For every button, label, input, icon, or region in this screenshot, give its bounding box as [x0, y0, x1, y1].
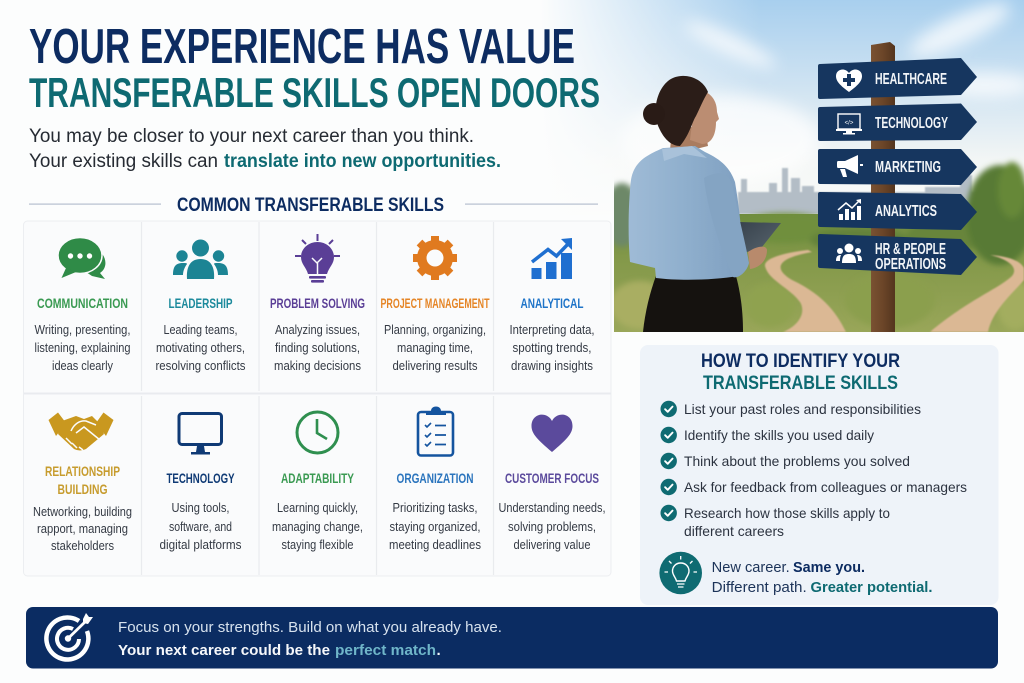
skill: organization: meeting deadlines: [389, 538, 481, 552]
sleeve: [732, 222, 749, 278]
skill: customer focus: delivering value: [514, 538, 591, 552]
skill: project management: managing time,: [397, 341, 473, 355]
icon: teal light bulb: [659, 552, 702, 594]
skill: problem solving: PROBLEM SOLVING: [270, 295, 365, 311]
title: YOUR EXPERIENCE HAS VALUE: [29, 20, 575, 74]
title: TRANSFERABLE SKILLS OPEN DOORS: [29, 69, 600, 116]
shirt: [629, 146, 742, 280]
sign: hr and people operations: HR & PEOPLE: [875, 241, 946, 258]
skill: analytical: [510, 238, 594, 373]
skill: organization: staying organized,: [390, 520, 480, 534]
skill: project management: [380, 236, 490, 373]
section heading: common transferable skills: COMMON TRANSFERABLE SKILLS: [177, 195, 444, 216]
sign: hr and people operations: [818, 234, 977, 275]
sign: technology: TECHNOLOGY: [875, 115, 948, 132]
icon: clock: [297, 412, 338, 453]
skill: relationship building: RELATIONSHIP: [45, 463, 120, 479]
skill: technology: digital platforms: [160, 538, 242, 552]
checklist: Think about the problems you solved: [684, 453, 910, 469]
skill: leadership: [156, 240, 246, 373]
icon: speech bubbles: [58, 238, 105, 279]
skill: adaptability: [272, 412, 363, 552]
skill: adaptability: Learning quickly,: [277, 501, 358, 515]
photo: woman at a career crossroads with signpost: [540, 0, 1024, 332]
panel heading: TRANSFERABLE SKILLS: [703, 372, 898, 394]
skill: relationship building: stakeholders: [51, 539, 114, 553]
skill: analytical: Interpreting data,: [510, 323, 594, 337]
post: [871, 42, 895, 332]
icon: handshake: [48, 412, 114, 450]
subtitle: You may be closer to your next career than you think.: [29, 126, 474, 147]
icon: team: [173, 240, 228, 279]
skill: customer focus: Understanding needs,: [498, 501, 606, 515]
skill: communication: Writing, presenting,: [34, 323, 130, 337]
skill: project management: delivering results: [392, 359, 478, 373]
forking paths: [765, 250, 1024, 332]
skill: analytical: spotting trends,: [512, 341, 592, 355]
skyline: [738, 168, 1000, 214]
skill: relationship building: rapport, managing: [37, 522, 128, 536]
skill: leadership: Leading teams,: [164, 323, 238, 337]
icon: light bulb: [295, 234, 340, 283]
skill: organization: ORGANIZATION: [396, 470, 474, 486]
checklist: different careers: [684, 523, 784, 539]
tagline: Greater potential.: [810, 580, 932, 596]
skill: adaptability: managing change,: [272, 520, 363, 534]
sign: analytics: [818, 192, 977, 230]
skill: technology: TECHNOLOGY: [166, 470, 235, 486]
title: [29, 20, 600, 116]
banner text: Your next career could be the: [118, 642, 330, 659]
skill: leadership: LEADERSHIP: [168, 295, 232, 311]
sign: hr and people operations: OPERATIONS: [875, 256, 946, 273]
icon: bar chart with arrow: [532, 238, 572, 279]
sign: marketing: MARKETING: [875, 159, 941, 176]
panel: how to identify your transferable skills: [640, 345, 998, 605]
tagline: Different path.: [712, 580, 807, 596]
checklist: [660, 401, 967, 539]
collar: [662, 146, 707, 161]
skill: relationship building: Networking, building: [33, 505, 132, 519]
tablet: [740, 222, 781, 252]
meadow: [614, 214, 1024, 332]
skill: communication: [34, 238, 131, 373]
sign: analytics: ANALYTICS: [875, 203, 937, 220]
banner text: [118, 619, 502, 659]
signpost: [818, 42, 977, 332]
tagline: New career.: [712, 560, 790, 576]
checklist: Ask for feedback from colleagues or managers: [684, 479, 967, 495]
skill: leadership: motivating others,: [156, 341, 245, 355]
banner text: Focus on your strengths. Build on what you already have.: [118, 619, 502, 636]
panel heading: [701, 350, 900, 394]
checklist: Research how those skills apply to: [684, 505, 890, 521]
banner text: .: [436, 642, 441, 659]
skill: project management: Planning, organizing,: [384, 323, 486, 337]
neck and face: [670, 127, 708, 148]
skill: adaptability: ADAPTABILITY: [281, 470, 354, 486]
skill: customer focus: CUSTOMER FOCUS: [505, 470, 599, 486]
skill: problem solving: making decisions: [274, 359, 361, 373]
skill: relationship building: [33, 412, 132, 553]
grass highlights: [614, 280, 1024, 329]
skill: communication: listening, explaining: [34, 341, 131, 355]
hair: [656, 76, 708, 146]
banner text: perfect match: [335, 642, 436, 659]
skill: problem solving: [270, 234, 365, 373]
distant trees: [604, 162, 1024, 265]
skill: technology: [160, 414, 242, 552]
skill: technology: software, and: [169, 520, 232, 534]
skill: relationship building: BUILDING: [58, 481, 108, 497]
sign: healthcare: HEALTHCARE: [875, 71, 947, 88]
skill: technology: Using tools,: [172, 501, 230, 515]
icon: heart: [532, 415, 572, 452]
sign: healthcare: [818, 58, 977, 99]
skill: customer focus: solving problems,: [508, 520, 596, 534]
skill: problem solving: Analyzing issues,: [275, 323, 360, 337]
tagline: [712, 560, 932, 596]
icon: gear: [413, 236, 457, 280]
skill: analytical: drawing insights: [511, 359, 593, 373]
skill: communication: COMMUNICATION: [37, 295, 128, 311]
subtitle: translate into new opportunities.: [224, 151, 501, 172]
skill: organization: Prioritizing tasks,: [392, 501, 478, 515]
panel: skills grid: [24, 221, 611, 576]
checklist: Identify the skills you used daily: [684, 427, 874, 443]
tagline: Same you.: [793, 560, 865, 576]
skill: organization: [389, 406, 481, 552]
skill: adaptability: staying flexible: [282, 538, 354, 552]
skill: customer focus: [498, 415, 606, 552]
skill: problem solving: finding solutions,: [275, 341, 360, 355]
sky: [561, 0, 1024, 168]
checklist: List your past roles and responsibilities: [684, 401, 921, 417]
banner: focus on your strengths: [26, 607, 998, 668]
hand: [748, 247, 767, 269]
sign: technology: [818, 104, 977, 141]
icon: clipboard checklist: [418, 406, 453, 456]
skill: project management: PROJECT MANAGEMENT: [380, 295, 490, 311]
subtitle: [29, 126, 501, 172]
woman: [629, 76, 781, 332]
icon: monitor: [179, 414, 222, 454]
skill: analytical: ANALYTICAL: [520, 295, 584, 311]
clouds: [635, 0, 1024, 168]
sign: technology: </>: [845, 120, 854, 126]
icon: target with arrow: [46, 613, 93, 659]
skirt: [643, 276, 743, 332]
panel heading: HOW TO IDENTIFY YOUR: [701, 350, 900, 372]
subtitle: Your existing skills can: [29, 151, 218, 172]
skill: communication: ideas clearly: [52, 359, 114, 373]
skill: leadership: resolving conflicts: [156, 359, 246, 373]
sign: marketing: [818, 149, 977, 185]
